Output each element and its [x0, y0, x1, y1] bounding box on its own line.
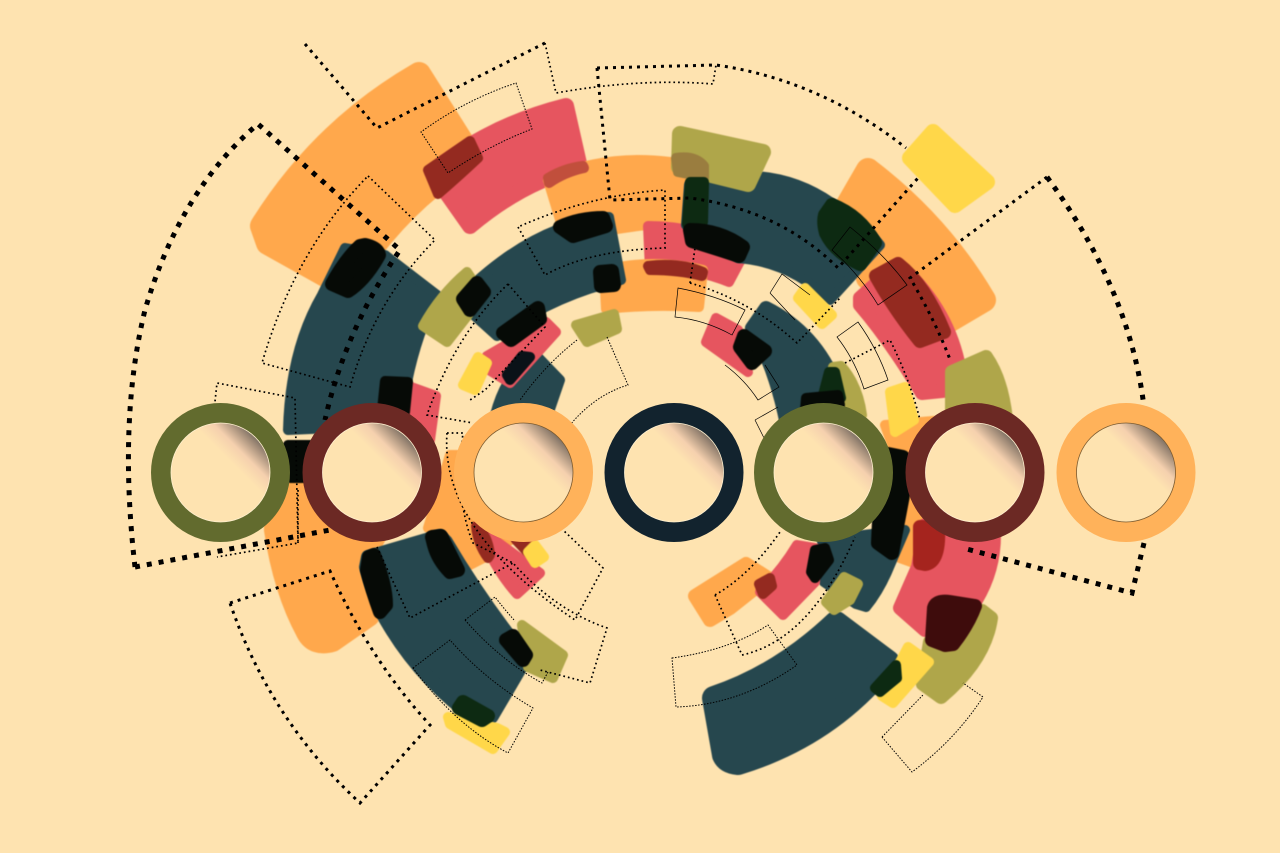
dotted outlines: medium	[213, 43, 920, 683]
thin arc outlines	[675, 227, 907, 440]
dotted outlines: fine	[413, 83, 983, 772]
ring: orange 2	[1066, 413, 1186, 532]
ring: olive 1	[161, 413, 280, 532]
ring: maroon 2	[916, 413, 1034, 532]
arc segments: red, olive and yellow accents	[405, 132, 991, 749]
arc segments: orange and red back layer	[262, 74, 1006, 641]
ring: maroon 1	[312, 413, 432, 532]
ring: navy	[614, 413, 734, 532]
dark overlaps between segments	[288, 182, 904, 720]
ring: orange 1	[464, 413, 583, 532]
dotted outlines: thick	[128, 43, 1144, 803]
ring: olive 2	[764, 413, 883, 532]
arc segments: teal bands	[288, 176, 905, 763]
